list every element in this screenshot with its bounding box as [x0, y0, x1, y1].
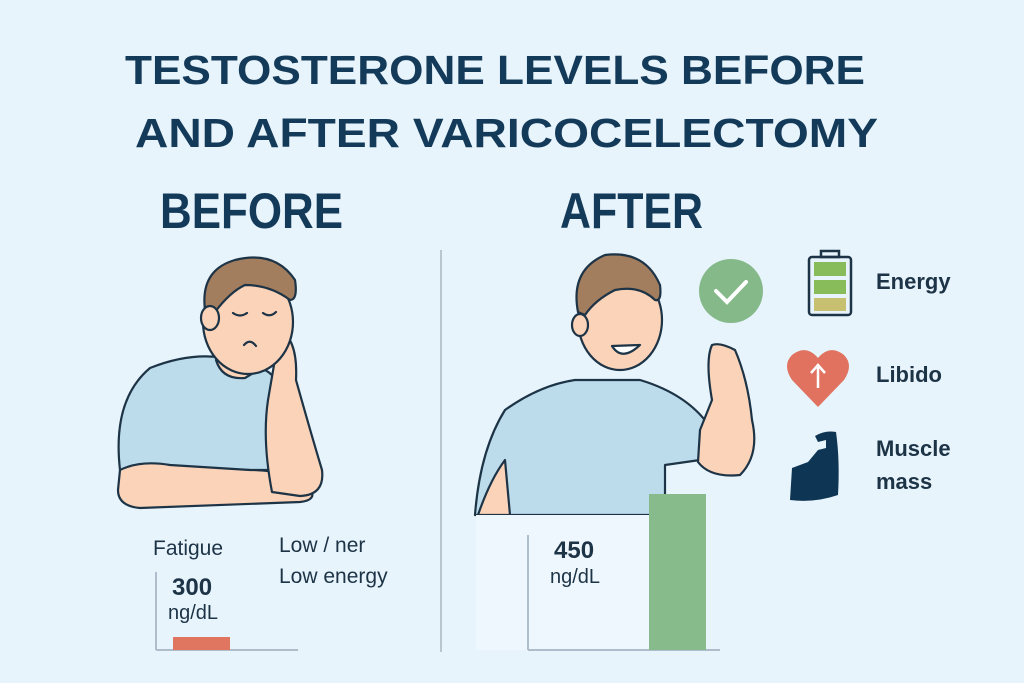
heading: before: BEFORE: [160, 183, 343, 239]
illustration: tired man: [118, 258, 322, 508]
chart: after bar: [476, 494, 720, 650]
chart: before bar: 300: [172, 574, 212, 601]
chart: after bar: ng/dL: [550, 566, 600, 588]
label: low energy: [279, 534, 388, 588]
heading: after: AFTER: [560, 183, 703, 239]
icon: battery: [809, 251, 851, 315]
panel: before: [118, 258, 388, 650]
label: muscle mass: Muscle: [876, 436, 951, 461]
illustration: happy man: [475, 254, 754, 515]
label: muscle mass: [876, 436, 951, 494]
chart: after bar: 450: [554, 537, 594, 564]
label: low energy: Low energy: [279, 565, 388, 588]
label: low energy: Low / ner: [279, 534, 365, 557]
title: AND AFTER VARICOCELECTOMY: [135, 110, 878, 156]
title: TESTOSTERONE LEVELS BEFORE: [125, 47, 865, 93]
panel: after: [475, 251, 951, 650]
chart: before bar: ng/dL: [168, 602, 218, 624]
icon: muscle: [790, 432, 839, 501]
label: energy: Energy: [876, 269, 951, 294]
label: muscle mass: mass: [876, 469, 932, 494]
label: libido: Libido: [876, 362, 942, 387]
chart: before bar: [156, 572, 298, 650]
title: [125, 47, 878, 156]
label: fatigue: Fatigue: [153, 537, 223, 560]
icon: heart: [787, 350, 849, 407]
icon: check: [699, 259, 763, 323]
